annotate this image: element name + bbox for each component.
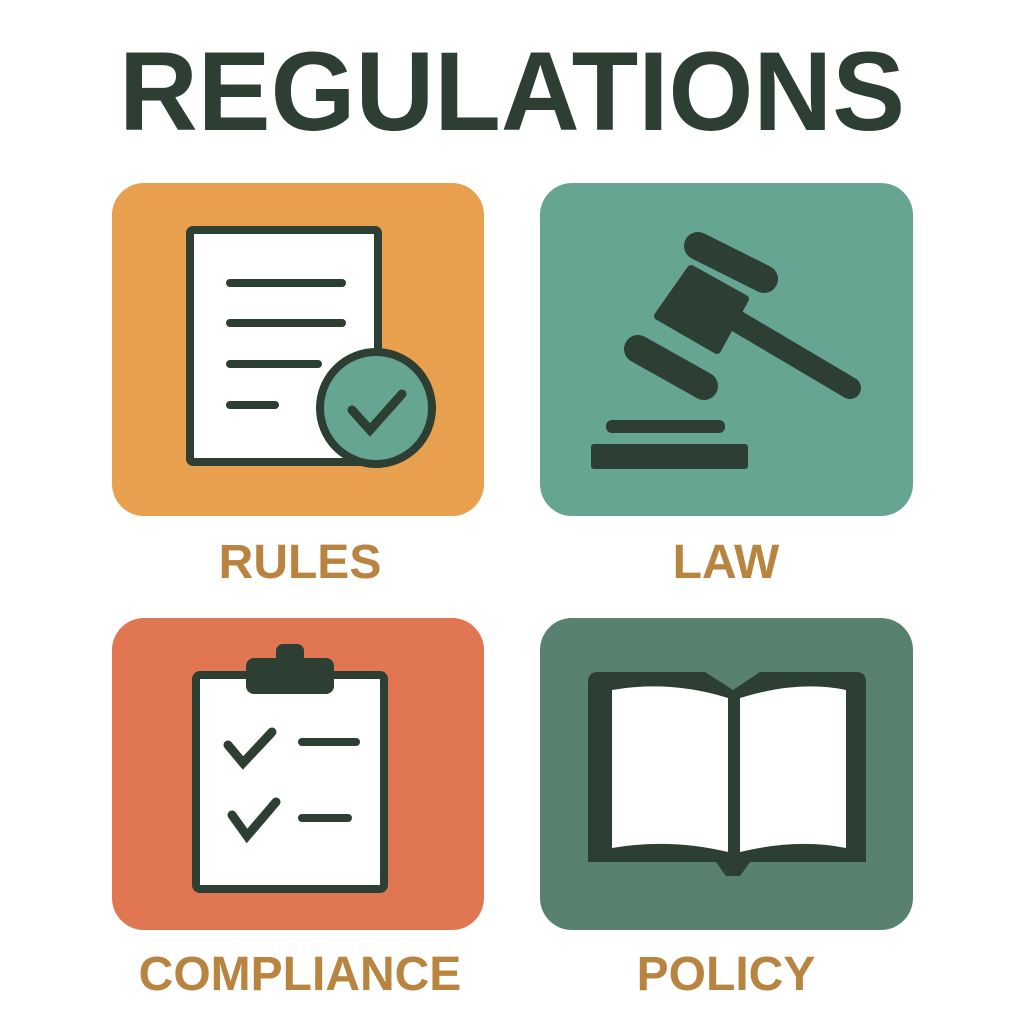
icon: book bbox=[588, 672, 866, 876]
panel: policy bbox=[540, 618, 913, 930]
label: law: LAW bbox=[673, 536, 780, 589]
panel: compliance bbox=[112, 618, 484, 930]
icon: clipboard bbox=[196, 648, 384, 889]
icon: gavel bbox=[591, 246, 850, 469]
icon: document with check bbox=[190, 230, 432, 464]
panel: rules bbox=[112, 183, 484, 516]
label: rules: RULES bbox=[219, 536, 381, 589]
title: REGULATIONS bbox=[119, 29, 905, 154]
label: policy: POLICY bbox=[637, 948, 815, 1001]
panel: law bbox=[540, 183, 913, 516]
label: compliance: COMPLIANCE bbox=[139, 948, 461, 1001]
